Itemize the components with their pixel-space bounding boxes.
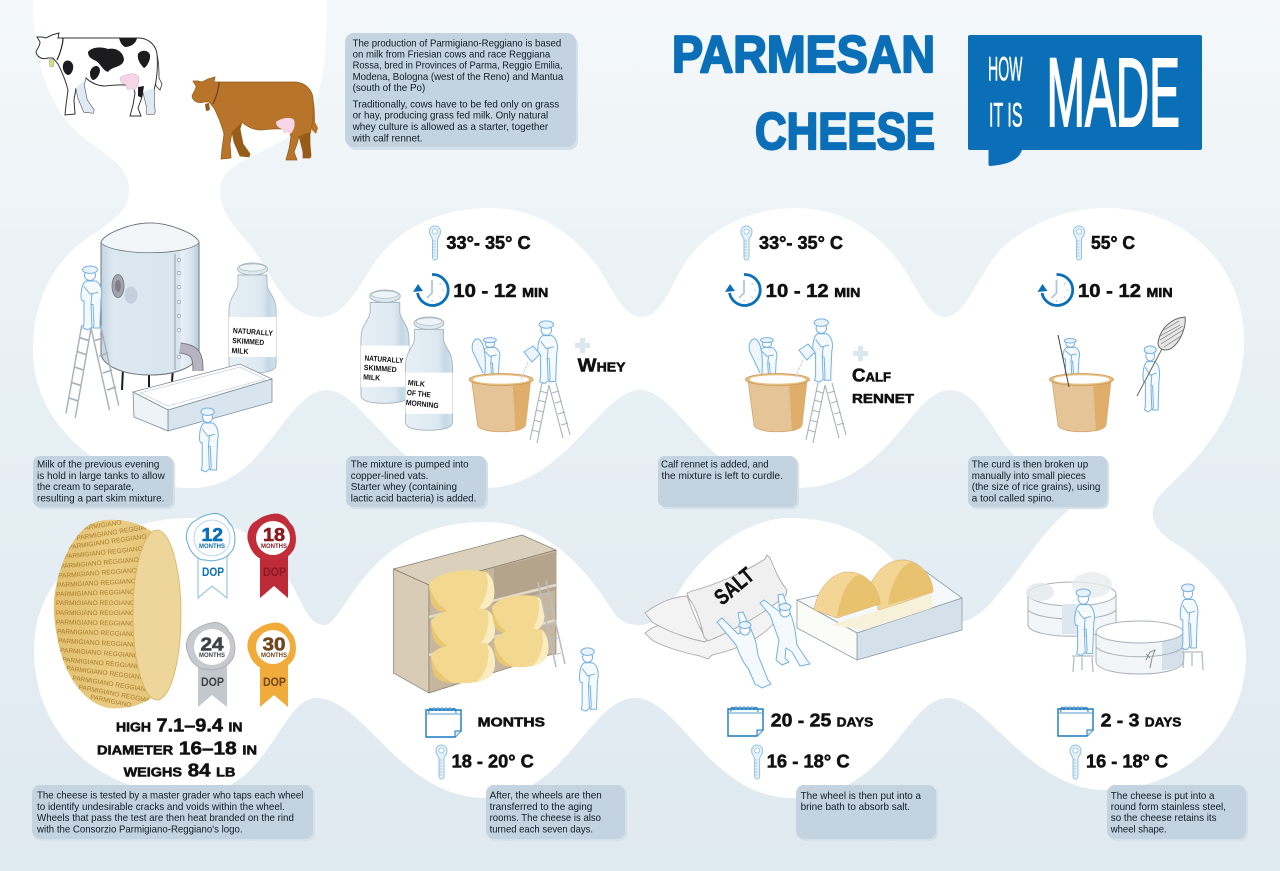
worker inspecting (580, 648, 598, 711)
title: PARMESAN (672, 26, 935, 84)
bottle: naturally skimmed: NATURALLY (364, 353, 404, 365)
worker with paddle (472, 338, 500, 380)
text block: step 2: copper-lined vats. (351, 470, 428, 482)
ladder (66, 325, 119, 418)
illustration: round forms (1026, 572, 1203, 674)
text block: step 4: a tool called spino. (972, 492, 1054, 504)
illustration: step 2 bottles and vat (361, 290, 570, 443)
time step 4: 10 - 12 min (1078, 280, 1173, 301)
bottle: milk of the morning: MORNING (405, 398, 439, 410)
bottle: naturally skimmed (361, 290, 409, 403)
badge: 24 months: 24 (200, 634, 224, 654)
illustration: cheese wheel: PARMIGIANO REGGIANO (66, 665, 145, 682)
brine bath (797, 571, 962, 660)
worker at tank (81, 266, 102, 330)
text block: brine (796, 785, 938, 841)
middle pillow (645, 596, 707, 642)
illustration: cheese wheel: PARMIGIANO (90, 694, 132, 709)
cheese wheels in brine (814, 560, 933, 630)
badge: 30 months (247, 622, 296, 707)
illustration: cheese wheel: PARMIGIANO REGGIANO (62, 657, 141, 671)
label: calf rennet (852, 365, 914, 407)
bottle: naturally skimmed milk: MILK (231, 346, 249, 356)
aging temperature: 18 - 20° C (452, 750, 534, 771)
brine temperature: 16 - 18° C (767, 750, 850, 771)
icon: thermometer step 3 (741, 226, 752, 260)
text block: step 4: manually into small pieces (972, 470, 1086, 482)
text block: intro: Modena, Bologna (west of the Reno) and Mantua (353, 71, 563, 83)
text block: step 3 (658, 456, 799, 509)
text block: grading: to identify undesirable cracks and voids within the wheel. (37, 801, 285, 813)
illustration: cheese wheel: PARMIGIANO (80, 519, 122, 533)
badge: 24 months: MONTHS (199, 653, 225, 659)
text block: step 2 (346, 456, 488, 509)
text block: aging (486, 785, 627, 841)
badge: 18 months: MONTHS (261, 544, 287, 550)
illustration: cheese wheel: PARMIGIANO REGGIANO (58, 638, 137, 649)
text block: form: wheel shape. (1110, 824, 1167, 836)
icon: Friesian cow (36, 33, 162, 116)
badge: 18 months (247, 513, 296, 598)
label: calf rennet: rennet (852, 386, 914, 407)
illustration: cheese wheel (54, 519, 181, 709)
badge: 18 months: DOP (263, 565, 286, 579)
text block: intro: Rossa, bred in Provinces of Parma, Reggio Emilia, (353, 60, 563, 72)
wheel specs: high 7.1–9.4 in (116, 715, 242, 736)
worker with spino (1143, 346, 1160, 412)
illustration: cheese wheel: PARMIGIANO REGGIANO (64, 546, 143, 561)
bottle: naturally skimmed milk: SKIMMED (232, 336, 265, 347)
text block: step 1: resulting a part skim mixture. (37, 492, 164, 504)
wheel specs: diameter 16–18 in (97, 737, 257, 758)
badge: 24 months (186, 622, 235, 707)
salt bag (687, 555, 787, 641)
worker pushing bag (717, 612, 771, 688)
logo: how it is made speech bubble: HOW (988, 51, 1023, 89)
text block: step 1: Milk of the previous evening (37, 458, 160, 470)
right round form (1096, 621, 1183, 674)
form duration: 2 - 3 days (1101, 710, 1182, 731)
bottle: naturally skimmed: SKIMMED (364, 363, 398, 374)
badge: 12 months: MONTHS (199, 544, 225, 550)
text block: step 4 (968, 456, 1109, 509)
text block: form: The cheese is put into a (1111, 790, 1215, 802)
text block: step 4: The curd is then broken up (972, 458, 1088, 470)
illustration: cheese wheel: PARMIGIANO REGGIANO (56, 600, 135, 607)
bottle: milk of the morning: OF THE (406, 388, 431, 399)
ladder (538, 580, 565, 667)
text block: aging: After, the wheels are then (490, 790, 602, 802)
text block: step 3: Calf rennet is added, and (661, 458, 769, 470)
text block: intro: or hay, producing grass fed milk. Only natural (353, 110, 548, 122)
text block: step 2: lactic acid bacteria) is added. (351, 492, 476, 504)
illustration: cheese wheel: PARMIGIANO REGGIANO (60, 557, 139, 570)
text block: aging: transferred to the aging (490, 801, 592, 813)
text block: step 2: Starter whey (containing (351, 481, 457, 493)
text block: grading: Wheels that pass the test are then heat branded on the rind (37, 812, 294, 824)
illustration: step 1 tank and trough (66, 223, 276, 472)
text block: intro: on milk from Friesian cows and race Reggiana (353, 48, 550, 60)
text block: step 2: The mixture is pumped into (351, 458, 469, 470)
bottle: milk of the morning: MILK (407, 378, 426, 389)
vat (1050, 374, 1114, 432)
worker with pole (1063, 339, 1080, 376)
title (672, 26, 935, 161)
text block: grading: The cheese is tested by a master grader who taps each wheel (37, 790, 303, 802)
bottle: naturally skimmed milk (229, 263, 276, 373)
illustration: cheese wheel: PARMIGIANO REGGIANO (56, 619, 135, 628)
wheel specs (97, 715, 257, 781)
badge: 24 months: DOP (201, 675, 224, 689)
stool left (1072, 656, 1094, 672)
wheel specs: weighs 84 lb (124, 760, 235, 781)
worker on stool (1180, 584, 1198, 650)
illustration: cheese wheel: PARMIGIANO REGGIANO (58, 567, 137, 580)
text block: intro (345, 33, 578, 150)
illustration: cheese wheel: PARMIGIANO REGGIANO (56, 610, 135, 617)
icon: thermometer step 2 (429, 226, 441, 260)
illustration: step 3 vat (746, 319, 846, 443)
label: calf rennet: Calf (852, 365, 891, 386)
bottle: milk of the morning (405, 317, 452, 430)
worker on stool (1075, 589, 1094, 656)
badge: 30 months: DOP (263, 675, 286, 689)
icon: clock step 2 (413, 274, 448, 305)
aging duration: months (478, 710, 545, 731)
drain pipe (180, 348, 198, 371)
text block: intro: The production of Parmigiano-Reggiano is based (353, 37, 561, 49)
text block: step 1: is hold in large tanks to allow (37, 470, 165, 482)
icon: clock step 4 (1038, 274, 1073, 305)
ladder (530, 383, 570, 443)
tank legs (122, 368, 173, 390)
icon: thermometer brine (752, 745, 763, 779)
text block: grading: with the Consorzio Parmigiano-Reggiano's logo. (36, 824, 242, 836)
text block: brine: The wheel is then put into a (801, 790, 921, 802)
logo: how it is made speech bubble (968, 35, 1202, 166)
text block: intro: whey culture is allowed as a starter, together (352, 121, 549, 133)
text block: intro: with calf rennet. (352, 132, 423, 144)
text block: grading (32, 785, 315, 841)
illustration: cheese wheel: PARMIGIANO REGGIANO (76, 523, 155, 542)
ladder (806, 383, 846, 443)
temperature step 3: 33°- 35° C (759, 232, 843, 253)
text block: step 4: (the size of rice grains), using (972, 481, 1101, 493)
spino net (1137, 317, 1185, 396)
worker with paddle (749, 338, 777, 380)
temperature step 2: 33°- 35° C (446, 232, 531, 253)
text block: intro: Traditionally, cows have to be fed only on grass (353, 99, 559, 111)
illustration: step 4 vat and spino (1050, 317, 1185, 432)
worker pouring (521, 321, 557, 383)
badge: 30 months: 30 (262, 634, 286, 654)
badge: 12 months: DOP (202, 565, 224, 579)
left round form (1028, 582, 1116, 636)
badge: 30 months: MONTHS (261, 653, 287, 659)
icon: calendar form (1058, 707, 1093, 736)
form temperature: 16 - 18° C (1086, 750, 1168, 771)
text block: aging: turned each seven days. (490, 824, 593, 836)
illustration: cheese wheel: PARMIGIANO REGGIANO (56, 589, 135, 599)
icon: thermometer form (1070, 745, 1081, 779)
text block: form: round form stainless steel, (1111, 801, 1226, 813)
worker pouring (795, 319, 832, 382)
vat (746, 374, 810, 432)
text block: brine: brine bath to absorb salt. (801, 801, 910, 813)
brine duration: 20 - 25 days (771, 710, 874, 731)
trough (133, 364, 272, 431)
text block: intro: (south of the Po) (353, 82, 425, 94)
icon: clock step 3 (725, 274, 760, 305)
worker pushing bag (760, 594, 810, 666)
text block: step 1 (33, 456, 175, 509)
icon: calendar brine (728, 707, 763, 736)
badge: 18 months: 18 (263, 524, 285, 545)
label: whey: Whey (578, 355, 626, 376)
badge: 12 months (186, 513, 235, 598)
icon: thermometer step 4 (1073, 226, 1085, 260)
temperature step 4: 55° C (1091, 232, 1135, 253)
illustration: cheese wheel: PARMIGIANO REGGIANO (72, 675, 151, 694)
illustration: cheese wheel: PARMIGIANO REGGIANO (57, 629, 136, 638)
lower pillow (645, 608, 775, 659)
bottle: naturally skimmed milk: NATURALLY (233, 326, 273, 338)
bottle: naturally skimmed: MILK (363, 372, 381, 383)
logo: how it is made speech bubble: IT IS (989, 97, 1022, 135)
worker at trough (200, 408, 218, 472)
icon: calendar aging (426, 708, 461, 737)
badge: 12 months: 12 (202, 524, 223, 545)
icon: thermometer aging (436, 745, 447, 779)
text block: step 3: the mixture is left to curdle. (662, 470, 783, 482)
stool right (1182, 652, 1203, 670)
illustration: cheese wheel: PARMIGIANO REGGIANO (78, 684, 157, 706)
illustration: cheese wheel: PARMIGIANO REGGIANO (57, 578, 136, 589)
illustration: cheese wheel: PARMIGIANO REGGIANO (60, 647, 139, 660)
icon: plus whey (575, 338, 590, 353)
illustration: salt bags and brine bath (645, 555, 962, 688)
illustration: aging shelf (394, 535, 565, 693)
icon: plus rennet (853, 346, 868, 361)
text block: form: so the cheese retains its (1111, 812, 1216, 824)
time step 2: 10 - 12 min (453, 280, 548, 301)
title: CHEESE (755, 103, 935, 161)
text block: form (1107, 785, 1248, 841)
text block: step 1: the cream to separate, (37, 481, 134, 493)
tank (101, 223, 199, 375)
icon: Reggiana red cow (192, 77, 318, 160)
salt bag: SALT (709, 562, 759, 610)
illustration: cheese wheel: PARMIGIANO REGGIANO (68, 533, 147, 551)
text block: aging: rooms. The cheese is also (490, 812, 601, 824)
time step 3: 10 - 12 min (766, 280, 860, 301)
vat (469, 374, 533, 432)
